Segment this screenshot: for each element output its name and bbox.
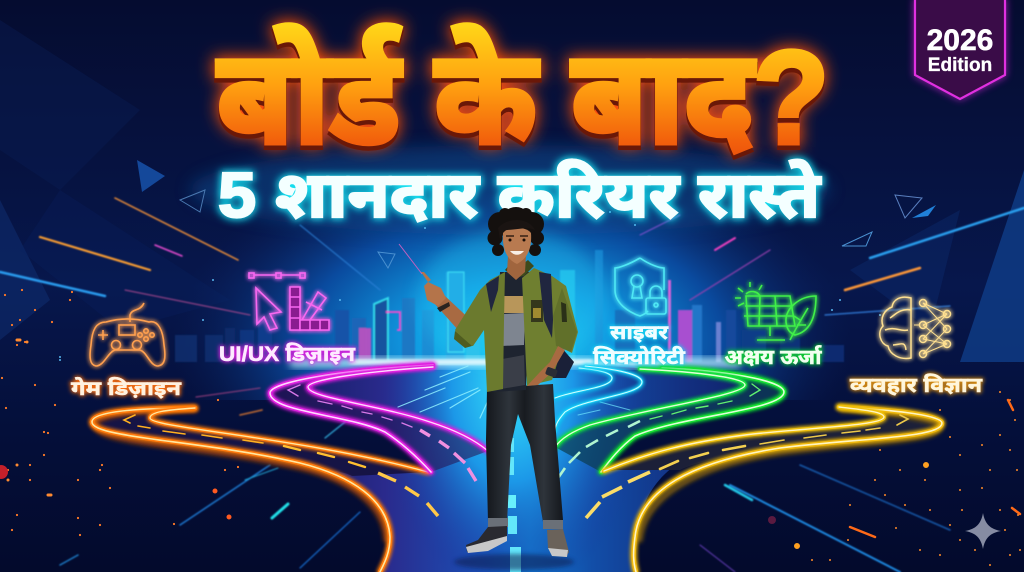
road: behavioural science yellow <box>586 407 942 572</box>
hair fringe <box>498 220 535 240</box>
icon: sparkle watermark <box>965 513 1001 549</box>
orange particles <box>1 212 1020 565</box>
eyes and smile <box>508 238 512 242</box>
left shoe <box>466 526 507 552</box>
floating triangles <box>137 160 936 268</box>
neck <box>507 256 526 280</box>
forearm and pointing hand <box>434 296 476 331</box>
label: cyber security <box>593 322 686 369</box>
icon: game controller <box>90 303 165 366</box>
backpack <box>548 340 574 378</box>
road: renewable energy green <box>555 368 784 478</box>
badge: 2026 edition: Edition <box>928 55 992 76</box>
face <box>503 228 531 264</box>
label: cyber security: सिक्योरिटी <box>593 345 686 369</box>
label: cyber security: सिक्योरिटी <box>593 345 686 369</box>
label: game design: गेम डिज़ाइन <box>71 376 182 400</box>
jacket right side <box>522 268 578 386</box>
label: UI/UX design: UI/UX डिज़ाइन <box>219 342 356 366</box>
light streaks <box>0 198 1024 572</box>
label: cyber security: साइबर <box>610 322 669 344</box>
character: student pointing <box>399 207 578 570</box>
label: cyber security: साइबर <box>610 322 669 344</box>
label: renewable energy: अक्षय ऊर्जा <box>724 345 823 369</box>
backpack straps <box>539 272 553 338</box>
title: बोर्ड के बाद? <box>217 24 829 171</box>
subtitle: 5 शानदार करियर रास्ते <box>218 159 821 231</box>
badge: 2026 edition <box>914 0 1006 100</box>
jacket left side and sleeve <box>455 272 505 392</box>
city skyline: left <box>175 272 480 362</box>
road: cyber security cyan <box>555 366 642 432</box>
icon: shield and lock <box>615 258 666 316</box>
title: बोर्ड के बाद? <box>217 24 829 171</box>
label: UI/UX design: UI/UX डिज़ाइन <box>219 342 356 366</box>
hair <box>488 207 544 256</box>
badge: 2026 edition: 2026 <box>927 24 993 57</box>
road: game design orange <box>92 407 438 572</box>
right hand and watch <box>527 346 565 386</box>
subtitle: 5 शानदार करियर रास्ते <box>218 159 821 231</box>
label: game design: गेम डिज़ाइन <box>71 376 182 400</box>
title: बोर्ड के बाद? <box>217 28 829 175</box>
center road dashes <box>508 438 521 572</box>
label: behavioural science: व्यवहार विज्ञान <box>849 373 983 397</box>
icon: brain and network <box>880 297 950 358</box>
icon: cursor and colour palette <box>249 273 329 330</box>
legs <box>486 384 563 522</box>
central road surface <box>272 230 784 572</box>
road markings in the center <box>398 366 630 418</box>
icon: solar panel and leaf <box>735 282 816 340</box>
city skyline: right <box>560 250 844 362</box>
right shoe <box>547 529 569 557</box>
shirt <box>492 272 530 392</box>
label: renewable energy: अक्षय ऊर्जा <box>724 345 823 369</box>
road: UI/UX magenta <box>270 365 488 481</box>
label: behavioural science: व्यवहार विज्ञान <box>849 373 983 397</box>
